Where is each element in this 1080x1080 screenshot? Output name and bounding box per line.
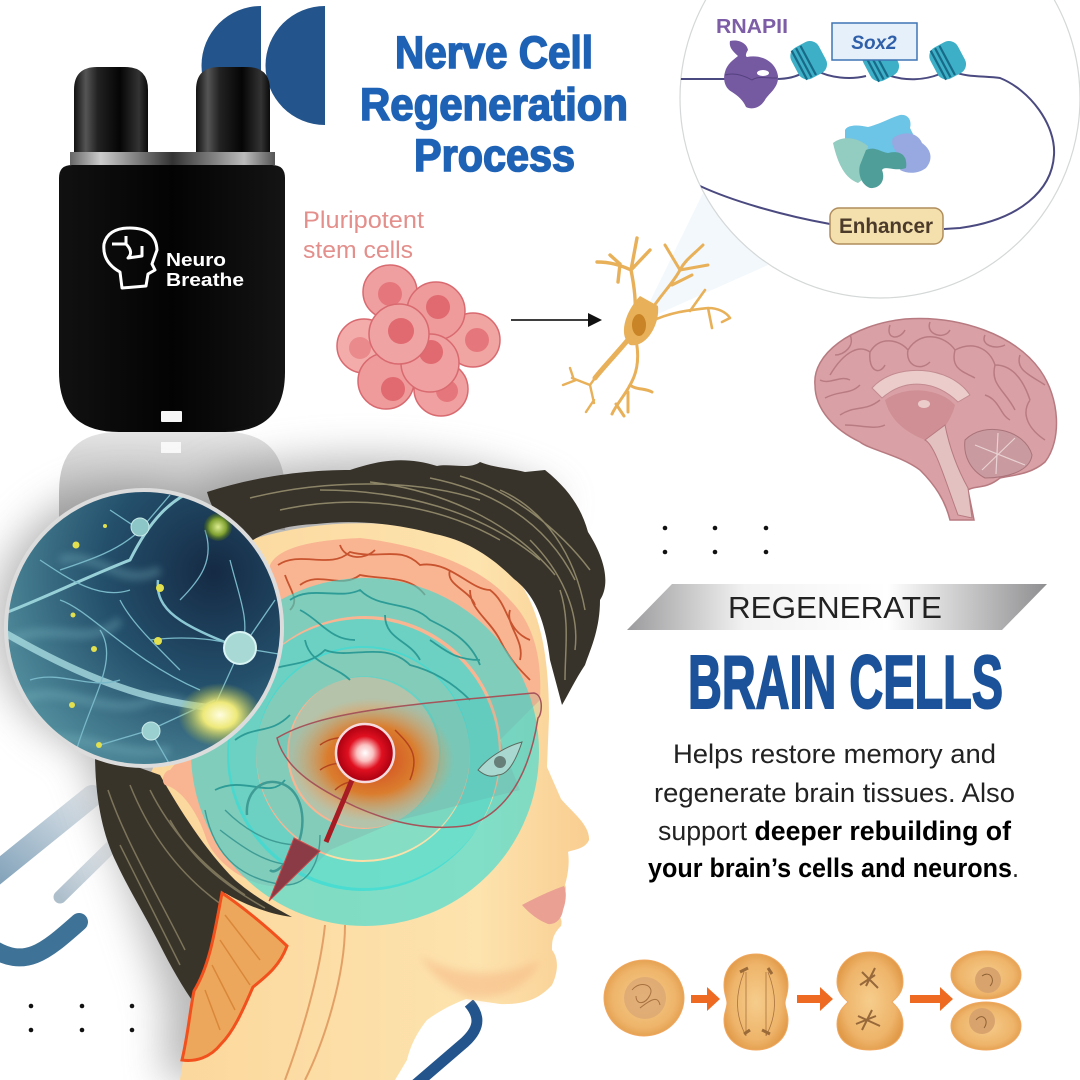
brain folds beneath rings (215, 590, 480, 790)
product reflection (59, 432, 285, 530)
decorative dots left (29, 1004, 134, 1032)
arrow 1 (691, 987, 720, 1011)
arrow: stem cells to neuron (511, 313, 602, 327)
back hair (95, 752, 292, 1006)
product brand name: Breathe (166, 270, 244, 290)
label: pluripotent stem cells: stem cells (303, 237, 413, 264)
icon: stem cell cluster (337, 265, 500, 416)
glowing synapses (204, 513, 232, 541)
product: Neuro Breathe inhaler (59, 67, 285, 432)
icon: brain cross-section (815, 318, 1056, 520)
cell stage 4 (951, 951, 1021, 1050)
body text: Helps restore memory and (673, 739, 996, 769)
icon: head with puzzle (104, 228, 157, 288)
product body (59, 165, 285, 432)
body text: support deeper rebuilding of (658, 816, 1012, 846)
magnifier cone (640, 193, 768, 322)
RNAPII label: RNAPII (716, 16, 788, 38)
skin (150, 523, 589, 1080)
product brand name: Neuro (166, 250, 226, 270)
label: pluripotent stem cells: Pluripotent (303, 207, 424, 234)
panel: gene regulation magnifier (680, 0, 1080, 298)
jaw shading (420, 955, 540, 998)
dendrite network (30, 495, 285, 765)
Sox2 label box: Sox2 (851, 33, 897, 54)
decorative dots right (663, 526, 768, 554)
cyan sound rings (210, 597, 520, 907)
cell stage 2 (724, 954, 788, 1050)
top hair (207, 460, 605, 705)
ear (247, 782, 302, 871)
muscle (182, 893, 287, 1060)
title: Process (414, 130, 575, 181)
arrow 3 (910, 987, 953, 1011)
head shadow (0, 457, 560, 1080)
cell stage 3 (837, 952, 903, 1050)
title: Regeneration (360, 79, 628, 130)
lips (522, 886, 566, 924)
neural network magnifier (0, 489, 285, 767)
decorative ribbons left (0, 796, 112, 957)
product caps (74, 67, 270, 155)
decorative navy half circles (202, 6, 325, 125)
icon: neuron (563, 238, 730, 416)
banner: regenerate: REGENERATE (728, 590, 942, 625)
cloudy tissue texture (14, 552, 193, 758)
thick axon (0, 630, 215, 708)
arrow 2 (797, 987, 833, 1011)
laser arrow (269, 724, 394, 901)
Enhancer label (830, 208, 943, 244)
protein complex (833, 115, 931, 188)
navy ribbon behind neck (415, 1003, 477, 1080)
red marker (336, 724, 394, 782)
glasses outline (277, 693, 541, 827)
DNA strand (680, 70, 1054, 229)
neuron bodies (224, 632, 256, 664)
brain (163, 538, 540, 886)
body text: your brain’s cells and neurons. (648, 853, 1019, 883)
body text (648, 739, 1019, 883)
icon: mitosis stages (604, 951, 1021, 1050)
spinal cord (285, 925, 345, 1080)
title: Nerve Cell (395, 27, 593, 78)
banner: regenerate (627, 584, 1047, 630)
illustration: head profile (95, 460, 605, 1080)
body text: regenerate brain tissues. Also (654, 778, 1015, 808)
cell stage 1 (604, 960, 684, 1036)
eye (478, 742, 522, 776)
title (360, 27, 628, 181)
inner ring with hot spot (289, 676, 454, 828)
RNAPII enzyme (724, 40, 778, 108)
Sox2 label box (832, 23, 917, 60)
nucleosomes (787, 37, 970, 85)
Enhancer label: Enhancer (839, 215, 933, 238)
